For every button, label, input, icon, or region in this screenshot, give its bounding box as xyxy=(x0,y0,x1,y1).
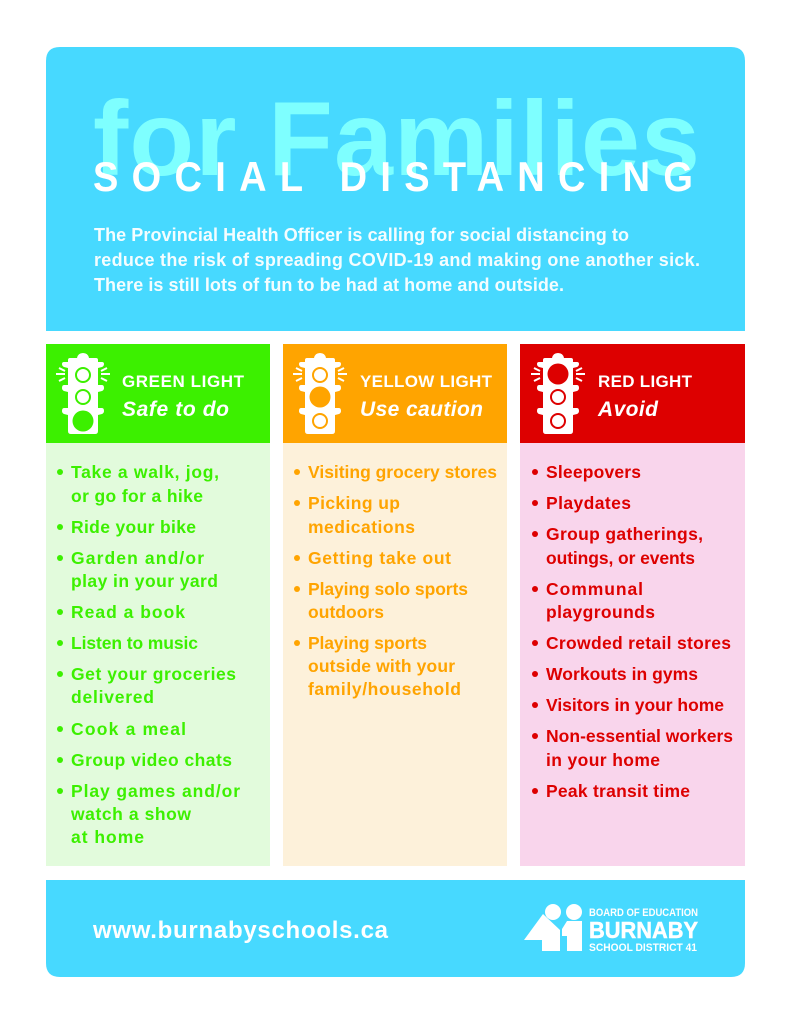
icon: yellow traffic light xyxy=(293,353,347,434)
yellow list xyxy=(294,462,497,699)
logo text: SCHOOL DISTRICT 41 xyxy=(589,942,697,954)
green list: Get your groceries xyxy=(71,664,236,684)
icon: green traffic light xyxy=(56,353,110,434)
yellow list: family/household xyxy=(308,679,461,699)
icon: red traffic light xyxy=(531,353,585,434)
yellow list: outdoors xyxy=(308,602,384,622)
green list: Cook a meal xyxy=(71,719,186,739)
green header band xyxy=(46,344,270,443)
yellow list: medications xyxy=(308,517,415,537)
green list: Play games and/or xyxy=(71,781,240,801)
yellow list: Getting take out xyxy=(308,548,451,568)
yellow list: Playing solo sports xyxy=(308,579,468,599)
green list: at home xyxy=(71,827,144,847)
red list: Crowded retail stores xyxy=(546,633,731,653)
green list: delivered xyxy=(71,687,154,707)
green subheading: Safe to do xyxy=(122,398,229,421)
panel: red light xyxy=(520,344,745,866)
panel: yellow light xyxy=(283,344,507,866)
red list: Peak transit time xyxy=(546,781,690,801)
yellow heading: YELLOW LIGHT xyxy=(360,372,493,391)
green list: or go for a hike xyxy=(71,486,203,506)
website url: www.burnabyschools.ca xyxy=(92,917,389,944)
yellow subheading: Use caution xyxy=(360,398,483,421)
red list: Communal xyxy=(546,579,643,599)
red list: Visitors in your home xyxy=(546,695,724,715)
red list: playgrounds xyxy=(546,602,655,622)
green list: Take a walk, jog, xyxy=(71,462,219,482)
yellow list background xyxy=(283,442,507,866)
red header band xyxy=(520,344,745,443)
intro text: The Provincial Health Officer is calling for social distancing to xyxy=(94,225,629,245)
green list: Read a book xyxy=(71,602,185,622)
footer panel xyxy=(46,880,745,977)
logo text: BOARD OF EDUCATION xyxy=(589,907,698,919)
intro text: There is still lots of fun to be had at home and outside. xyxy=(94,275,564,295)
red list background xyxy=(520,442,745,866)
yellow list: Picking up xyxy=(308,493,400,513)
logo text: BURNABY xyxy=(589,917,698,943)
panel: green light xyxy=(46,344,270,866)
green list: Ride your bike xyxy=(71,517,196,537)
green list: play in your yard xyxy=(71,571,218,591)
yellow header band xyxy=(283,344,507,443)
red list: Playdates xyxy=(546,493,631,513)
red heading: RED LIGHT xyxy=(598,372,693,391)
green list: watch a show xyxy=(70,804,191,824)
green list xyxy=(57,462,240,847)
icon: two figures xyxy=(524,904,582,951)
red list: Non-essential workers xyxy=(546,726,733,746)
yellow list: Playing sports xyxy=(308,633,427,653)
red list: outings, or events xyxy=(546,548,695,568)
yellow list: outside with your xyxy=(308,656,455,676)
title: social distancing: SOCIAL DISTANCING xyxy=(93,154,693,200)
red list: in your home xyxy=(546,750,660,770)
red list: Workouts in gyms xyxy=(546,664,698,684)
intro text xyxy=(94,225,700,295)
red subheading: Avoid xyxy=(597,398,659,421)
title: for Families: for Families xyxy=(93,80,700,198)
intro text: reduce the risk of spreading COVID-19 and making one another sick. xyxy=(94,250,700,270)
red list: Group gatherings, xyxy=(546,524,703,544)
red list: Sleepovers xyxy=(546,462,641,482)
red list xyxy=(532,462,733,801)
green list background xyxy=(46,442,270,866)
logo text xyxy=(589,907,698,954)
logo: Burnaby school district xyxy=(524,904,698,954)
yellow list: Visiting grocery stores xyxy=(308,462,497,482)
green list: Group video chats xyxy=(71,750,232,770)
green list: Garden and/or xyxy=(71,548,204,568)
green list: Listen to music xyxy=(71,633,198,653)
header panel xyxy=(46,47,745,331)
green heading: GREEN LIGHT xyxy=(122,372,245,391)
